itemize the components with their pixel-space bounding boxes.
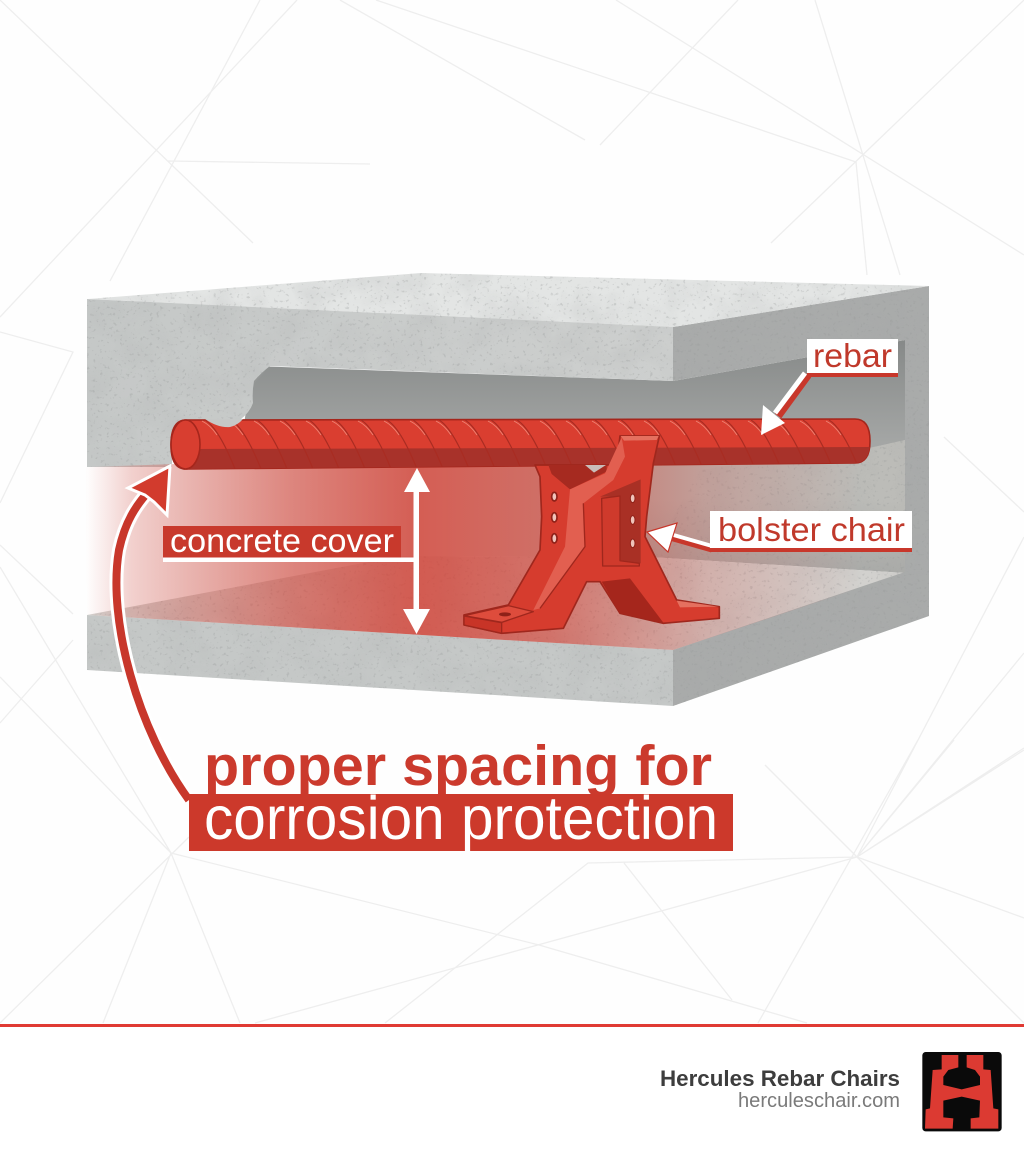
rib ridges: [205, 420, 859, 469]
bolster chair: [464, 436, 719, 633]
label: rebar: rebar: [813, 337, 892, 374]
light diagonal band: [533, 437, 625, 610]
brand name: Hercules Rebar Chairs: [660, 1066, 900, 1091]
left foot top: [464, 606, 533, 622]
lower back wall: [87, 440, 905, 615]
right foot top: [677, 601, 719, 607]
upper back wall in shadow: [240, 340, 905, 450]
inner leg shadow: [602, 578, 663, 623]
post divider: [540, 503, 585, 608]
concrete slab model: [87, 273, 929, 706]
lower back wall shade: [560, 500, 905, 573]
rib highlights: [202, 421, 841, 435]
icon: Hercules logo: [922, 1052, 1002, 1131]
slab floor: [87, 556, 905, 650]
headline line 2: corrosion protection: [204, 784, 718, 852]
lower shaded band: [190, 447, 870, 469]
left bolt holes: [552, 492, 557, 543]
footer background: [0, 1027, 1024, 1154]
red protection gradient zone: [85, 440, 905, 650]
footer: [0, 1024, 1024, 1154]
headline: [189, 734, 733, 852]
label: bolster chair: bolster chair: [718, 511, 905, 548]
right side face: [673, 286, 929, 706]
arrow: rebar: [761, 373, 808, 435]
concrete texture: [87, 273, 929, 706]
headline line 1: proper spacing for: [204, 734, 712, 798]
foot bolt hole: [499, 612, 511, 616]
rebar: [171, 419, 875, 472]
footer rule: [0, 1024, 1024, 1027]
right recess: [600, 479, 641, 563]
top slab front face: [87, 299, 673, 467]
bar cut end: [171, 420, 200, 469]
left foot front: [464, 616, 502, 633]
top cap: [621, 436, 659, 441]
label: concrete cover: concrete cover: [170, 522, 394, 559]
bottom slab front face: [87, 615, 673, 706]
right bolt holes: [630, 494, 635, 548]
curved arrow to bar end: [116, 466, 189, 800]
top surface: [88, 273, 929, 327]
brand url: herculeschair.com: [738, 1090, 900, 1112]
chair silhouette: [464, 436, 719, 633]
arch gap: [585, 465, 606, 473]
double arrow: cover depth: [403, 468, 430, 634]
headline line 2 banner: [189, 794, 733, 851]
chipped concrete over bar: [205, 419, 243, 427]
inner plate: [602, 496, 639, 566]
arrow: bolster chair: [647, 523, 712, 552]
bar body: [171, 419, 870, 469]
arch shadow: [548, 465, 607, 489]
